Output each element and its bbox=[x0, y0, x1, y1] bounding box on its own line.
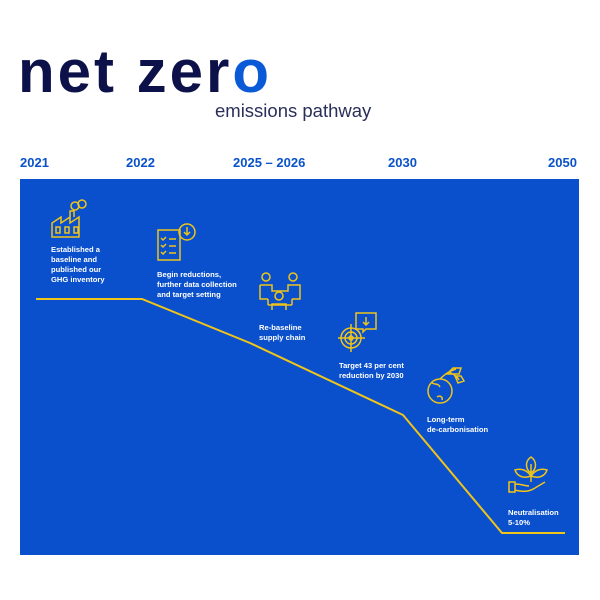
subtitle: emissions pathway bbox=[215, 100, 371, 121]
text: long-term bbox=[427, 415, 488, 434]
icon: target bbox=[338, 312, 377, 352]
text: 2022 bbox=[157, 270, 237, 299]
text: 2021: GHG inventory bbox=[51, 275, 105, 284]
text: 2021 bbox=[51, 245, 105, 284]
year labels: 2021 bbox=[20, 155, 49, 170]
text: 2021: Established a bbox=[51, 245, 100, 254]
text: 2050 bbox=[508, 508, 559, 527]
text: 2050: 5-10% bbox=[508, 518, 530, 527]
year labels bbox=[20, 155, 577, 170]
year labels: 2022 bbox=[126, 155, 155, 170]
panel: pathway bbox=[20, 179, 579, 555]
text: 2030: reduction by 2030 bbox=[339, 371, 404, 380]
text: long-term: de-carbonisation bbox=[427, 425, 488, 434]
text: 2022: Begin reductions, bbox=[157, 270, 221, 279]
year labels: 2050 bbox=[548, 155, 577, 170]
year labels: 2030 bbox=[388, 155, 417, 170]
pathway line bbox=[36, 298, 565, 534]
text: long-term: Long-term bbox=[427, 415, 465, 424]
text: 2025 bbox=[259, 323, 305, 342]
title: net zero bbox=[18, 38, 272, 105]
text: 2022: further data collection bbox=[157, 280, 237, 289]
icon: globe bbox=[427, 367, 466, 404]
text: 2030 bbox=[339, 361, 404, 380]
icon: plant hand bbox=[508, 456, 548, 493]
year labels: 2025 – 2026 bbox=[233, 155, 305, 170]
text: 2030: Target 43 per cent bbox=[339, 361, 404, 370]
icon: checklist bbox=[157, 223, 196, 261]
text: 2021: baseline and bbox=[51, 255, 97, 264]
text: 2025: supply chain bbox=[259, 333, 305, 342]
text: 2021: published our bbox=[51, 265, 101, 274]
text: 2025: Re-baseline bbox=[259, 323, 302, 332]
text: 2050: Neutralisation bbox=[508, 508, 559, 517]
icon: people bbox=[259, 272, 301, 310]
text: 2022: and target setting bbox=[157, 290, 221, 299]
icon: factory bbox=[51, 199, 87, 238]
